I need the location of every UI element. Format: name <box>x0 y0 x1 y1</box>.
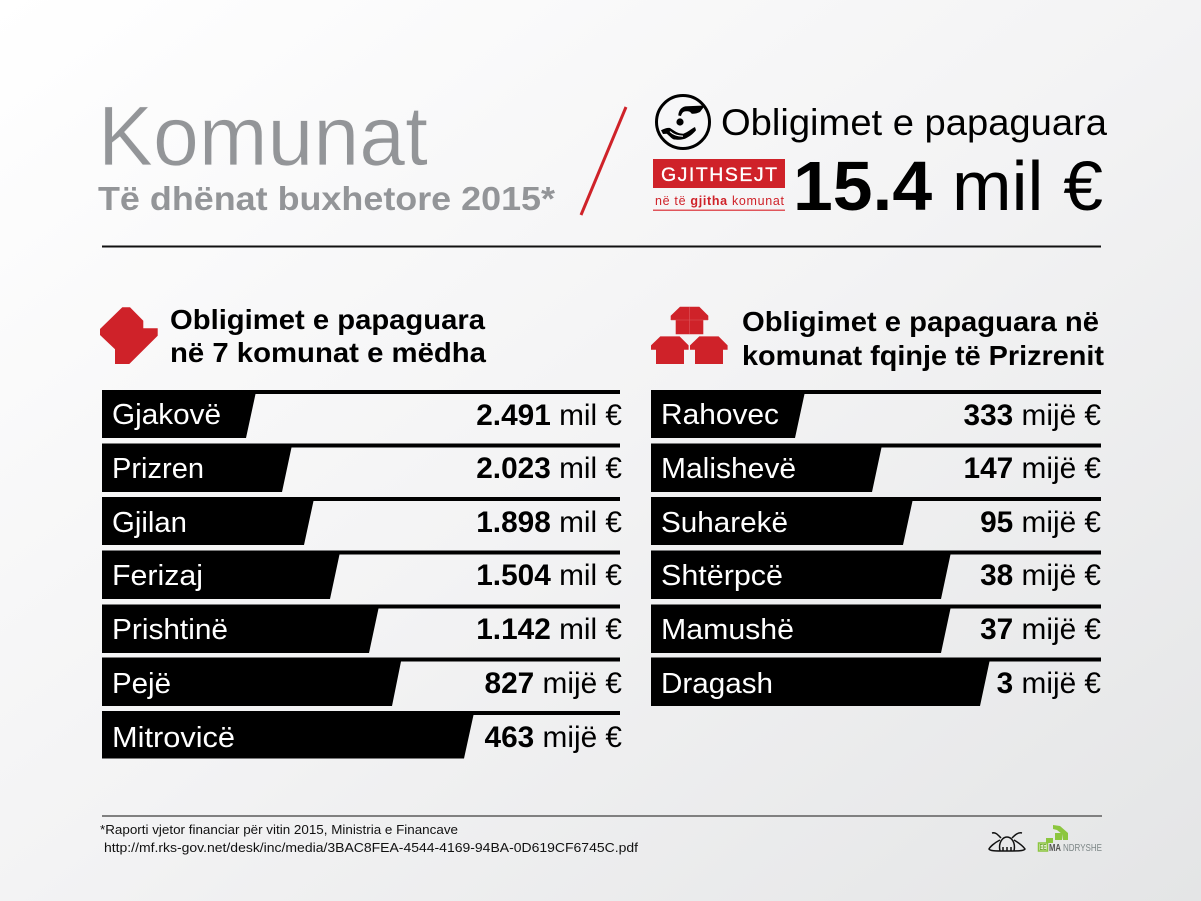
row: Suharekë: 95 mijë € <box>980 506 1101 539</box>
row: Dragash <box>651 658 1101 706</box>
icon: three houses <box>651 307 728 364</box>
row: Pejë: Pejë <box>112 668 171 700</box>
row: Rahovec <box>651 390 1101 438</box>
row: Suharekë: Suharekë <box>661 507 788 539</box>
row: Shtërpcë: Shtërpcë <box>661 560 783 592</box>
heading: neighbouring municipalities: komunat fqinje të Prizrenit <box>742 340 1104 371</box>
icon: hands with coin <box>656 96 710 148</box>
row: Dragash: 3 mijë € <box>997 667 1101 700</box>
logo: green brand mark: MA <box>1049 843 1061 854</box>
badge: total label: GJITHSEJT <box>661 164 777 186</box>
panel: municipalities neighbouring Prizren <box>651 306 1104 706</box>
heading: total obligations: Obligimet e papaguara <box>721 102 1107 143</box>
row: Mamushë: 37 mijë € <box>980 613 1101 646</box>
row: Malishevë: 147 mijë € <box>964 452 1101 485</box>
row: Ferizaj <box>102 550 622 599</box>
heading: neighbouring municipalities: Obligimet e papaguara në <box>742 306 1099 337</box>
heading: neighbouring municipalities <box>742 306 1104 371</box>
row: Dragash: Dragash <box>661 668 773 700</box>
row: Prizren <box>102 444 622 492</box>
red slash divider <box>581 107 626 215</box>
footnote source: http://mf.rks-gov.net/desk/inc/media/3BAC8FEA-4544-4169-94BA-0D619CF6745C.pdf <box>104 840 638 855</box>
row: Prishtinë: Prishtinë <box>112 614 228 646</box>
logo: green brand mark: NDRYSHE <box>1063 843 1102 854</box>
footnote source: *Raporti vjetor financiar për vitin 2015, Ministria e Financave <box>100 822 458 837</box>
row: Mamushë: Mamushë <box>661 614 794 646</box>
logo: green brand mark <box>1038 825 1102 854</box>
heading: large municipalities <box>170 304 486 368</box>
icon: Kosovo map <box>100 307 158 364</box>
badge: total label <box>653 159 785 211</box>
row: Shtërpcë <box>651 550 1101 599</box>
row: Prishtinë <box>102 604 622 653</box>
heading: large municipalities: në 7 komunat e mëdha <box>170 337 486 368</box>
footnote source <box>100 822 638 855</box>
row: Pejë <box>102 658 622 706</box>
row: Prizren: Prizren <box>112 453 204 485</box>
row: Ferizaj: Ferizaj <box>112 560 203 592</box>
title: Komunat <box>98 89 428 183</box>
row: Rahovec: Rahovec <box>661 399 779 431</box>
logo: green brand mark: EE <box>1040 843 1047 852</box>
row: Suharekë <box>651 497 1101 545</box>
row: Gjakovë <box>102 390 622 438</box>
row: Gjilan <box>102 497 622 545</box>
row: Gjilan: 1.898 mil € <box>476 506 622 539</box>
row: Shtërpcë: 38 mijë € <box>980 559 1101 592</box>
row: Gjilan: Gjilan <box>112 507 187 539</box>
panel: 7 large municipalities <box>100 304 622 758</box>
heading: large municipalities: Obligimet e papaguara <box>170 304 485 335</box>
row: Mitrovicë: Mitrovicë <box>112 722 235 754</box>
row: Rahovec: 333 mijë € <box>964 399 1101 432</box>
row: Gjakovë: 2.491 mil € <box>476 399 622 432</box>
icon: ant logo <box>989 833 1025 851</box>
total amount: 15.4 mil € <box>793 147 1103 225</box>
subtitle: Të dhënat buxhetore 2015* <box>98 180 555 217</box>
row: Malishevë <box>651 444 1101 492</box>
row: Mitrovicë <box>102 711 622 758</box>
row: Mamushë <box>651 604 1101 653</box>
badge: total label: në të gjitha komunat <box>655 194 785 208</box>
row: Mitrovicë: 463 mijë € <box>485 721 622 754</box>
row: Pejë: 827 mijë € <box>485 667 622 700</box>
row: Malishevë: Malishevë <box>661 453 796 485</box>
row: Gjakovë: Gjakovë <box>112 399 221 431</box>
row: Prishtinë: 1.142 mil € <box>476 613 622 646</box>
row: Ferizaj: 1.504 mil € <box>476 559 622 592</box>
row: Prizren: 2.023 mil € <box>476 452 622 485</box>
